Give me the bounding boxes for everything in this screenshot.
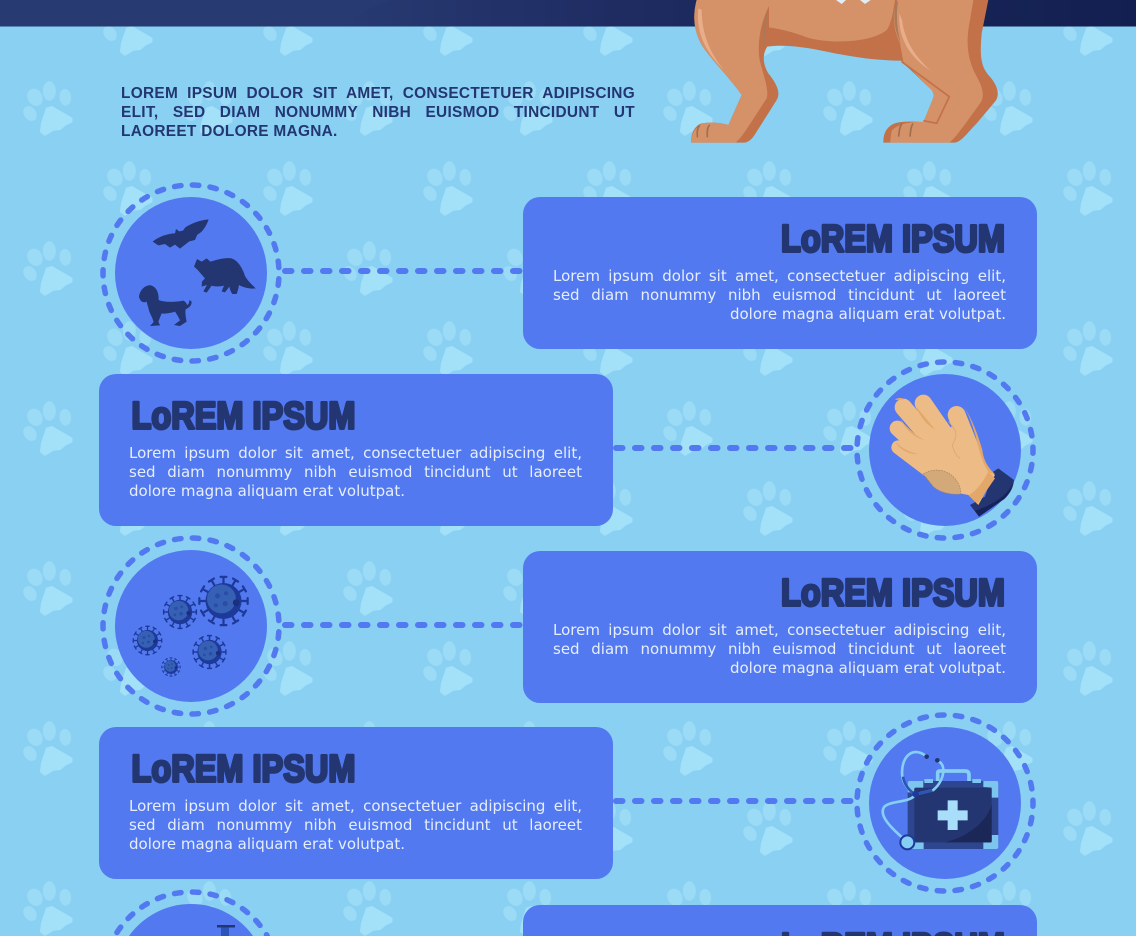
body text: dolore magna aliquam erat volutpat. — [730, 304, 1006, 322]
icon: viruses in circle — [100, 535, 522, 717]
intro text — [121, 85, 635, 140]
body text — [129, 796, 582, 852]
body text: sed diam nonummy nibh euismod tincidunt ut laoreet — [129, 462, 582, 480]
intro text: LAOREET DOLORE MAGNA. — [121, 123, 338, 140]
panel: lorem ipsum card 5 — [523, 905, 1037, 936]
icon: hand with patch in circle — [613, 359, 1036, 541]
body text: sed diam nonummy nibh euismod tincidunt ut laoreet — [129, 816, 582, 834]
top header band — [0, 0, 1136, 26]
icon: partial circle — [114, 889, 270, 936]
panel: lorem ipsum card 4 — [99, 727, 613, 878]
body text: Lorem ipsum dolor sit amet, consectetuer adipiscing elit, — [553, 266, 1006, 284]
heading: LoREM IPSUM — [132, 748, 356, 790]
row 4 — [99, 712, 1036, 894]
body text: Lorem ipsum dolor sit amet, consectetuer adipiscing elit, — [553, 620, 1006, 638]
row 5 — [114, 889, 1037, 936]
row 3 — [100, 535, 1037, 717]
illustration: dog legs — [691, 0, 998, 143]
panel: lorem ipsum card 2 — [99, 374, 613, 526]
intro text: ELIT, SED DIAM NONUMMY NIBH EUISMOD TINCIDUNT UT — [121, 104, 635, 121]
body text: sed diam nonummy nibh euismod tincidunt ut laoreet — [553, 640, 1006, 658]
icon: bat, raccoon and dog in circle — [100, 182, 522, 364]
dog highlights — [698, 8, 931, 71]
heading: LoREM IPSUM — [781, 218, 1005, 260]
body text: Lorem ipsum dolor sit amet, consectetuer adipiscing elit, — [129, 796, 582, 814]
body text: dolore magna aliquam erat volutpat. — [730, 658, 1006, 676]
row 1 — [100, 182, 1037, 364]
body text: sed diam nonummy nibh euismod tincidunt ut laoreet — [553, 286, 1006, 304]
body text — [129, 444, 582, 500]
far leg outline — [902, 62, 949, 123]
body text: dolore magna aliquam erat volutpat. — [129, 834, 405, 852]
heading: LoREM IPSUM — [132, 396, 356, 438]
body text: dolore magna aliquam erat volutpat. — [129, 482, 405, 500]
body text: Lorem ipsum dolor sit amet, consectetuer adipiscing elit, — [129, 444, 582, 462]
panel: lorem ipsum card 1 — [523, 197, 1037, 348]
icon: medical kit and stethoscope in circle — [613, 712, 1036, 894]
dog leg light shading — [691, 0, 983, 143]
body text — [553, 266, 1006, 322]
body text — [553, 620, 1006, 676]
heading: LoREM IPSUM — [781, 572, 1005, 614]
row 2 — [99, 359, 1036, 541]
panel: lorem ipsum card 3 — [523, 551, 1037, 702]
intro text: LOREM IPSUM DOLOR SIT AMET, CONSECTETUER ADIPISCING — [121, 85, 635, 102]
